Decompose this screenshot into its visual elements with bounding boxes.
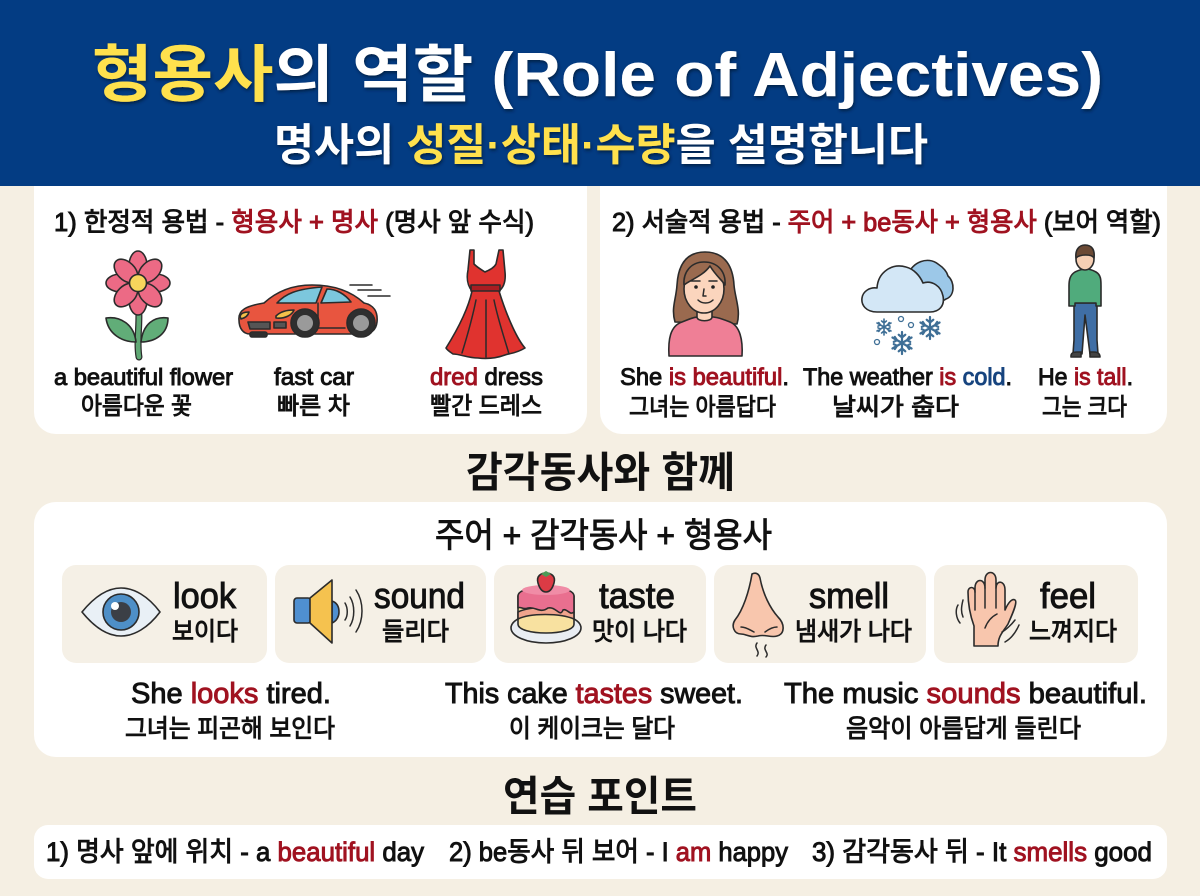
card: sound: 들리다 xyxy=(382,618,449,646)
heading: predicative use: 2) 서술적 용법 - 주어 + be동사 + 형용사 (보어 역할) xyxy=(612,207,1161,237)
card: feel xyxy=(934,565,1138,663)
header banner xyxy=(0,0,1200,186)
caption: fast car: fast car xyxy=(274,364,354,391)
card: smell: 냄새가 나다 xyxy=(795,618,912,646)
card: smell xyxy=(714,565,926,663)
example: looks tired xyxy=(125,678,335,743)
example: sounds beautiful: 음악이 아름답게 들린다 xyxy=(846,715,1081,743)
section heading: with sense verbs: 감각동사와 함께 xyxy=(466,449,735,496)
caption: red dress: 빨간 드레스 xyxy=(430,393,542,420)
caption: she is beautiful: She is beautiful. xyxy=(620,364,789,391)
caption: she is beautiful: 그녀는 아름답다 xyxy=(629,394,776,421)
panel: attributive use xyxy=(34,186,587,434)
example: tastes sweet xyxy=(445,678,743,743)
card: look xyxy=(62,565,267,663)
card: sound xyxy=(275,565,486,663)
panel: sense verbs xyxy=(34,502,1167,757)
icon: hand xyxy=(956,572,1019,646)
point 2: 2) be동사 뒤 보어 - I am happy xyxy=(449,837,788,867)
heading: attributive use: 1) 한정적 용법 - 형용사 + 명사 (명사 앞 수식) xyxy=(54,207,534,237)
formula: 주어 + 감각동사 + 형용사 xyxy=(435,517,772,555)
caption: he is tall xyxy=(1038,364,1133,421)
card: sound: sound xyxy=(374,575,465,616)
caption: red dress xyxy=(430,364,543,420)
icon: nose xyxy=(733,573,783,657)
subtitle: 명사의 성질·상태·수량을 설명합니다 xyxy=(274,121,928,170)
caption: a beautiful flower xyxy=(54,364,233,420)
caption: the weather is cold: The weather is cold. xyxy=(803,364,1012,391)
caption: a beautiful flower: 아름다운 꽃 xyxy=(81,393,192,420)
icon: speaker xyxy=(294,580,362,643)
icon: eye xyxy=(82,588,160,636)
icon: snow cloud xyxy=(862,260,953,354)
panel: practice points xyxy=(34,825,1167,879)
example: tastes sweet: This cake tastes sweet. xyxy=(445,678,743,710)
card: feel: 느껴지다 xyxy=(1029,618,1117,646)
card: taste xyxy=(494,565,706,663)
icon: cake xyxy=(511,571,581,643)
caption: the weather is cold xyxy=(803,364,1012,421)
caption: he is tall: He is tall. xyxy=(1038,364,1133,391)
card: taste: taste xyxy=(599,575,675,616)
example: looks tired: 그녀는 피곤해 보인다 xyxy=(125,715,335,743)
caption: fast car xyxy=(274,364,354,420)
example: looks tired: She looks tired. xyxy=(131,678,331,710)
caption: the weather is cold: 날씨가 춥다 xyxy=(832,394,959,421)
caption: he is tall: 그는 크다 xyxy=(1042,394,1127,421)
point 3: 3) 감각동사 뒤 - It smells good xyxy=(812,837,1152,867)
icon: woman xyxy=(669,252,742,356)
example: sounds beautiful xyxy=(784,678,1147,743)
caption: a beautiful flower: a beautiful flower xyxy=(54,364,233,390)
card: look: 보이다 xyxy=(172,618,238,646)
card: taste: 맛이 나다 xyxy=(592,618,687,646)
panel: predicative use xyxy=(600,186,1167,434)
example: sounds beautiful: The music sounds beautiful. xyxy=(784,678,1147,710)
icon: red car xyxy=(239,285,390,337)
icon: tall man xyxy=(1069,245,1101,357)
caption: red dress: dred dress xyxy=(430,364,543,391)
card: look: look xyxy=(173,575,237,616)
caption: she is beautiful xyxy=(620,364,789,421)
card: feel: feel xyxy=(1040,575,1096,616)
card: smell: smell xyxy=(809,575,889,616)
caption: fast car: 빠른 차 xyxy=(277,393,350,420)
icon: flower xyxy=(106,251,170,357)
point 1: 1) 명사 앞에 위치 - a beautiful day xyxy=(46,837,424,867)
icon: red dress xyxy=(446,250,525,358)
example: tastes sweet: 이 케이크는 달다 xyxy=(509,715,675,743)
section heading: practice points: 연습 포인트 xyxy=(503,773,697,820)
title: 형용사의 역할 (Role of Adjectives) xyxy=(92,41,1103,110)
